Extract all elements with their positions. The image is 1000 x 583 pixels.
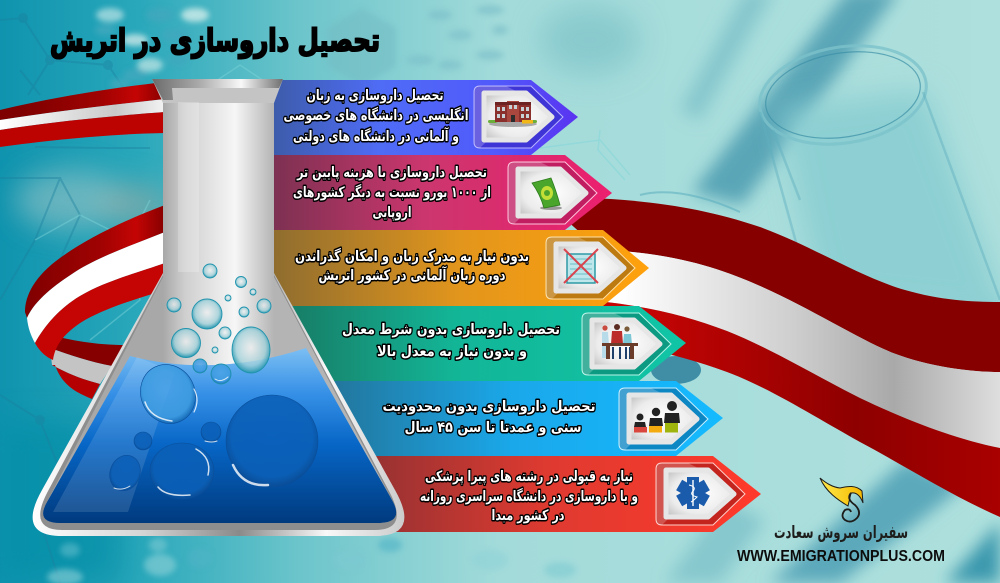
flask — [33, 79, 404, 536]
icon: crossed certificate — [564, 249, 598, 283]
panel: row 1 — [260, 80, 578, 155]
text: row 4 — [342, 322, 560, 360]
text: row 1: و آلمانی در دانشگاه های دولتی — [293, 127, 459, 145]
text: row 2 — [293, 165, 491, 221]
logo wing — [820, 478, 863, 506]
panel: row 4 — [280, 306, 686, 381]
lower bubbles background — [47, 538, 576, 583]
text: row 3: دوره زبان آلمانی در کشور اتریش — [318, 266, 506, 284]
text: row 6 — [420, 469, 638, 524]
text: row 6: و یا داروسازی در دانشگاه سراسری روزانه — [420, 487, 638, 505]
icon: banknote — [532, 178, 562, 210]
text: row 5: سنی و عمدتا تا سن ۴۵ سال — [404, 420, 582, 436]
panel: row 3 — [260, 230, 649, 306]
icon plate 4 — [582, 313, 671, 375]
bubbles inside the liquid — [105, 355, 318, 499]
text: row 5 — [382, 399, 596, 436]
panel: row 5 — [320, 381, 723, 456]
logo swan — [842, 493, 859, 522]
icon: three candidates — [634, 401, 680, 432]
icon plate 6 — [656, 463, 745, 525]
icon plate 1 — [474, 86, 563, 148]
ribbon: left swirl — [25, 205, 165, 399]
DNA molecule — [95, 8, 209, 89]
panel: row 2 — [260, 155, 612, 230]
text: row 1 — [284, 88, 468, 145]
text: row 3 — [295, 247, 529, 284]
bubbles above the liquid — [167, 264, 271, 384]
text: row 2: اروپایی — [372, 205, 412, 221]
bubble reflections — [114, 377, 268, 495]
flask glass — [43, 100, 396, 523]
text: row 2: از ۱۰۰۰ یورو نسبت به دیگر کشورهای — [293, 183, 491, 201]
DNA faint — [406, 5, 508, 70]
logo text: سفیران سروش سعادت — [774, 523, 908, 543]
icon plate 2 — [508, 162, 597, 224]
molecule network lines — [0, 14, 150, 583]
liquid — [43, 348, 396, 523]
icon plate 5 — [619, 388, 708, 450]
ribbon: Austrian flag right — [540, 197, 1000, 517]
icon: school building — [488, 101, 537, 127]
panel: row 6 — [350, 456, 761, 532]
icon plate 3 — [546, 237, 635, 299]
text: row 4: و بدون نیاز به معدل بالا — [377, 344, 527, 360]
test tube — [640, 34, 1000, 384]
text: row 1: انگلیسی در دانشگاه های خصوصی — [284, 106, 468, 124]
text: row 6: در کشور مبدا — [492, 508, 564, 524]
text: row 5: تحصیل داروسازی بدون محدودیت — [382, 399, 596, 415]
text: row 2: تحصیل داروسازی با هزینه پایین تر — [296, 165, 487, 181]
pale hexagon — [327, 8, 396, 86]
website address: WWW.EMIGRATIONPLUS.COM — [737, 548, 945, 565]
icon: people at table — [602, 324, 638, 359]
text: row 6: نیاز به قبولی در رشته های پیرا پزشکی — [425, 469, 633, 485]
neck highlight — [178, 102, 199, 272]
ribbon: top left — [0, 82, 165, 147]
liquid highlight — [53, 357, 175, 512]
icon: star of life — [676, 477, 710, 509]
flask outer body — [33, 100, 404, 536]
flask rim — [152, 79, 283, 103]
text: row 1: تحصیل داروسازی به زبان — [306, 88, 444, 104]
title: تحصیل داروسازی در اتریش — [50, 23, 380, 59]
flask inner grey line — [40, 100, 397, 530]
text: row 3: بدون نیاز به مدرک زبان و امکان گذراندن — [295, 247, 529, 265]
text: row 4: تحصیل داروسازی بدون شرط معدل — [342, 322, 560, 338]
logo: Safiran Soroush Saadat — [737, 478, 945, 565]
